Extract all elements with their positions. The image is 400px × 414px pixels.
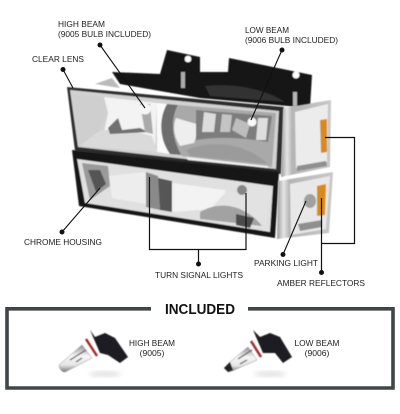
text: low beam label: (9006) <box>305 348 330 358</box>
icon: high beam bulb <box>59 330 128 377</box>
callout: low beam: (9006 BULB INCLUDED) <box>245 35 338 45</box>
low beam reflector <box>173 105 276 168</box>
headlight housing <box>67 87 284 174</box>
callout: chrome housing <box>24 188 102 247</box>
callout: clear lens <box>32 54 84 88</box>
text: low beam label <box>294 338 340 358</box>
text: low beam label: LOW BEAM <box>294 338 340 348</box>
callout: turn signal lights: TURN SIGNAL LIGHTS <box>155 270 243 280</box>
callout: low beam <box>245 25 338 120</box>
mounting bracket <box>95 50 312 108</box>
icon: low beam bulb <box>224 330 292 377</box>
text: high beam label: (9005) <box>140 348 165 358</box>
callout: amber reflectors: AMBER REFLECTORS <box>277 278 365 288</box>
callout: high beam: HIGH BEAM <box>58 19 105 29</box>
amber reflector upper <box>320 119 327 153</box>
amber reflector lower <box>317 184 326 216</box>
panel: included bulbs <box>7 302 393 388</box>
callout: high beam <box>58 19 151 108</box>
text: high beam label <box>129 338 175 358</box>
turn signal housing <box>72 150 279 238</box>
text: high beam label: HIGH BEAM <box>129 338 175 348</box>
callout: amber reflectors <box>277 138 365 288</box>
callout: parking light: PARKING LIGHT <box>254 258 319 268</box>
upper corner light <box>281 100 331 177</box>
callout: low beam: LOW BEAM <box>245 25 289 35</box>
callout: turn signal lights <box>150 177 246 280</box>
callout: high beam: (9005 BULB INCLUDED) <box>58 29 151 39</box>
callout: clear lens: CLEAR LENS <box>32 54 84 64</box>
heading: included: INCLUDED <box>165 302 235 318</box>
callout: parking light <box>254 201 319 268</box>
callout: chrome housing: CHROME HOUSING <box>24 237 102 247</box>
high beam reflector <box>72 94 182 155</box>
lower corner light <box>277 172 333 239</box>
